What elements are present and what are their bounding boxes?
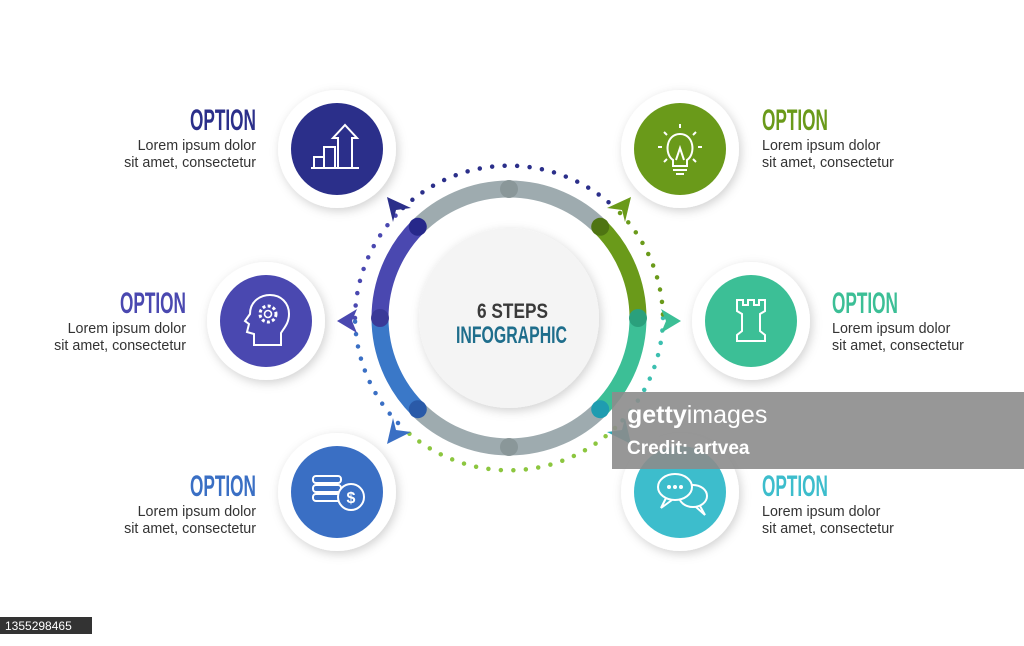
step 2 icon: head gear — [207, 262, 325, 380]
text: option 4: Lorem ipsum dolor — [762, 504, 881, 520]
arrows — [337, 197, 681, 444]
text: option 4: OPTION — [762, 470, 828, 503]
text: option 4 — [762, 470, 894, 537]
text: option 1: OPTION — [190, 104, 256, 137]
main ring — [380, 189, 638, 447]
text: option 6: sit amet, consectetur — [762, 155, 894, 171]
text: option 2: Lorem ipsum dolor — [68, 321, 186, 337]
text: option 2 — [54, 287, 186, 354]
text: option 3: Lorem ipsum dolor — [138, 504, 256, 520]
step 6 icon: bulb — [621, 90, 739, 208]
step 4 icon: chat — [621, 433, 739, 551]
text: option 2: sit amet, consectetur — [54, 338, 186, 354]
watermark: gettyimages — [627, 401, 767, 429]
step 3 icon: coins: $ — [347, 490, 356, 507]
text: option 3: sit amet, consectetur — [124, 521, 256, 537]
step 5 icon: rook — [692, 262, 810, 380]
text: option 5 — [832, 287, 964, 354]
dotted outer circle — [355, 166, 663, 470]
text: option 5: OPTION — [832, 287, 898, 320]
text: option 3: OPTION — [190, 470, 256, 503]
text: option 4: sit amet, consectetur — [762, 521, 894, 537]
ring joint dots — [371, 180, 647, 456]
watermark — [612, 392, 1024, 469]
center circle — [419, 228, 599, 408]
text: option 1 — [124, 104, 256, 171]
image id: 1355298465 — [5, 619, 72, 633]
text: option 2: OPTION — [120, 287, 186, 320]
text: option 6: OPTION — [762, 104, 828, 137]
text: option 6 — [762, 104, 894, 171]
text: option 1: sit amet, consectetur — [124, 155, 256, 171]
step 1 icon: chart — [278, 90, 396, 208]
center circle: INFOGRAPHIC — [456, 322, 567, 349]
step 3 icon: coins — [278, 433, 396, 551]
text: option 3 — [124, 470, 256, 537]
text: option 1: Lorem ipsum dolor — [138, 138, 256, 154]
text: option 6: Lorem ipsum dolor — [762, 138, 881, 154]
text: option 5: sit amet, consectetur — [832, 338, 964, 354]
image id — [0, 617, 92, 634]
text: option 5: Lorem ipsum dolor — [832, 321, 951, 337]
center circle: 6 STEPS — [477, 300, 548, 323]
watermark: Credit: artvea — [627, 438, 750, 459]
